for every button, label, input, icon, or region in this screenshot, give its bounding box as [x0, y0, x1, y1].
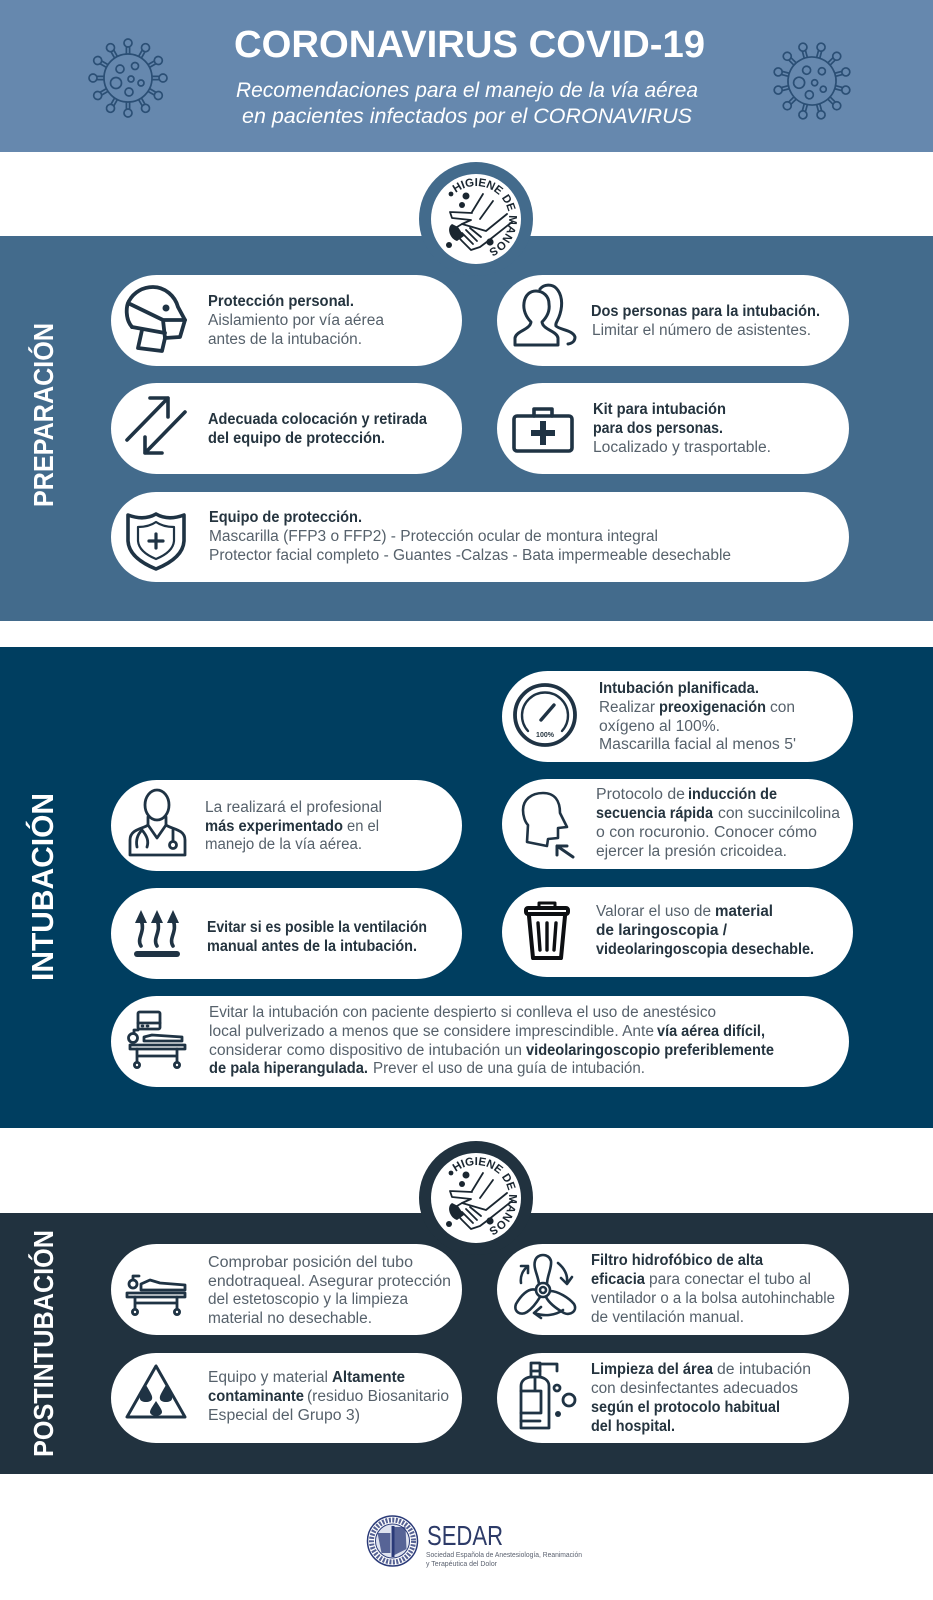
text: según el protocolo habitual [591, 1399, 780, 1416]
card: comprobar tubo [111, 1244, 462, 1335]
society name [426, 1552, 582, 1568]
subtitle: Recomendaciones para el manejo de la vía aérea [236, 79, 698, 102]
icon: face mask [127, 287, 185, 351]
text: videolaringoscopia desechable. [596, 941, 814, 958]
text: contaminante [208, 1388, 304, 1405]
text: endotraqueal. Asegurar protección [208, 1273, 451, 1290]
section label: intubación: INTUBACIÓN [24, 793, 60, 981]
text [596, 786, 840, 860]
icon: virus right [764, 33, 860, 129]
text: en el [347, 818, 379, 835]
text [207, 919, 427, 955]
text [209, 1004, 774, 1077]
text: material no desechable. [208, 1310, 372, 1327]
text: del estetoscopio y la limpieza [208, 1291, 408, 1308]
text: para dos personas. [593, 420, 723, 437]
card: dos personas [497, 275, 849, 366]
text: Limitar el número de asistentes. [592, 322, 811, 339]
seal [368, 1516, 418, 1566]
text: Especial del Grupo 3) [208, 1407, 360, 1424]
text [208, 293, 384, 348]
text: Limpieza del área [591, 1361, 713, 1378]
card: evitar intubación despierto [111, 996, 849, 1087]
card: kit [497, 383, 849, 474]
text: ejercer la presión cricoidea. [596, 843, 787, 860]
text: eficacia [591, 1271, 645, 1288]
card: limpieza del área [497, 1353, 849, 1443]
icon: doctor [130, 790, 185, 855]
text: Equipo de protección. [209, 509, 362, 526]
text: Adecuada colocación y retirada [208, 411, 427, 428]
text: del equipo de protección. [208, 430, 385, 447]
subtitle [236, 79, 698, 128]
text: manual antes de la intubación. [207, 938, 417, 955]
text: secuencia rápida [596, 805, 713, 822]
text: con [770, 699, 795, 716]
section label: preparación: PREPARACIÓN [28, 323, 59, 507]
title: CORONAVIRUS COVID-19 [234, 24, 705, 66]
icon: virus left [89, 39, 167, 117]
text: vía aérea difícil, [657, 1023, 765, 1040]
text: videolaringoscopio preferiblemente [526, 1042, 774, 1059]
text: inducción de [688, 786, 777, 803]
text [596, 903, 814, 958]
text [591, 303, 820, 339]
text: antes de la intubación. [208, 331, 362, 348]
text: Equipo y material [208, 1369, 328, 1386]
text: para conectar el tubo al [649, 1271, 811, 1288]
card: inducción secuencia rápida [502, 779, 853, 869]
text [599, 680, 796, 753]
text [591, 1252, 835, 1326]
text: Dos personas para la intubación. [591, 303, 820, 320]
society name: Sociedad Española de Anestesiología, Reanimación [426, 1552, 582, 1559]
subtitle: en pacientes infectados por el CORONAVIRUS [242, 105, 692, 128]
icon: shield [128, 514, 184, 569]
text: Mascarilla (FFP3 o FFP2) - Protección ocular de montura integral [209, 528, 658, 545]
icon: patient bed [127, 1276, 185, 1315]
text: Kit para intubación [593, 401, 726, 418]
badge: higiene de manos: HIGIENE DE MANOS [452, 1157, 517, 1235]
text: local pulverizado a menos que se considere imprescindible. Ante [209, 1023, 654, 1040]
badge: higiene de manos: HIGIENE DE MANOS [452, 178, 517, 256]
text: considerar como dispositivo de intubación un [209, 1042, 522, 1059]
card: filtro hidrofóbico [497, 1244, 849, 1335]
icon: patient bed with monitor [128, 1012, 185, 1068]
card: material desechable [502, 887, 853, 977]
text [208, 1369, 449, 1424]
text: preoxigenación [659, 699, 766, 716]
section label: postintubación: POSTINTUBACIÓN [28, 1230, 59, 1457]
icon: swap arrows [127, 398, 185, 453]
card: profesional experimentado [111, 780, 462, 871]
text [208, 1254, 451, 1327]
logo: SEDAR [368, 1516, 582, 1568]
text: Mascarilla facial al menos 5' [599, 736, 796, 753]
card: intubación planificada [502, 671, 853, 762]
text: Valorar el uso de [596, 903, 711, 920]
text: Evitar la intubación con paciente despierto si conlleva el uso de anestésico [209, 1004, 716, 1021]
icon: medical kit [514, 409, 572, 451]
icon: two people [515, 285, 575, 345]
text [209, 509, 731, 564]
text: Protector facial completo - Guantes -Calzas - Bata impermeable desechable [209, 547, 731, 564]
panel: preparación [0, 162, 933, 621]
panel: postintubación [0, 1141, 933, 1474]
icon: disinfectant spray [521, 1363, 575, 1428]
card: protección personal [111, 275, 462, 366]
text [591, 1361, 811, 1435]
text: Realizar [599, 699, 655, 716]
text: oxígeno al 100%. [599, 718, 720, 735]
text: con desinfectantes adecuados [591, 1380, 798, 1397]
icon: gauge [515, 685, 575, 745]
text: Localizado y trasportable. [593, 439, 771, 456]
text: Aislamiento por vía aérea [208, 312, 384, 329]
text: Altamente [332, 1369, 405, 1386]
header band [0, 0, 933, 152]
text: de intubación [717, 1361, 811, 1378]
icon: fan [515, 1255, 575, 1318]
text: Comprobar posición del tubo [208, 1254, 413, 1271]
card: altamente contaminante [111, 1353, 462, 1443]
society name: y Terapéutica del Dolor [426, 1561, 498, 1568]
card: equipo de protección [111, 492, 849, 582]
icon: heat arrows [134, 910, 180, 957]
text [208, 411, 427, 447]
text: Prever el uso de una guía de intubación. [373, 1060, 645, 1077]
text [593, 401, 771, 456]
card: evitar ventilación manual [111, 888, 462, 979]
text: Filtro hidrofóbico de alta [591, 1252, 763, 1269]
text: Evitar si es posible la ventilación [207, 919, 427, 936]
badge: higiene de manos [419, 162, 533, 264]
text: de laringoscopia / [596, 922, 728, 939]
wordmark: SEDAR [427, 1520, 503, 1551]
text: Protocolo de [596, 786, 685, 803]
icon: radiation triangle [127, 1366, 185, 1417]
icon: trash can [526, 903, 568, 958]
text: más experimentado [205, 818, 343, 835]
text: ventilador o a la bolsa autohinchable [591, 1290, 835, 1307]
text: del hospital. [591, 1418, 675, 1435]
icon: head profile with arrow [523, 793, 573, 857]
text: o con rocuronio. Conocer cómo [596, 824, 817, 841]
text [205, 799, 382, 853]
text: La realizará el profesional [205, 799, 382, 816]
badge: higiene de manos [419, 1141, 533, 1243]
text: de ventilación manual. [591, 1309, 744, 1326]
text: (residuo Biosanitario [307, 1388, 449, 1405]
card: colocación y retirada [111, 383, 462, 474]
text: Protección personal. [208, 293, 354, 310]
panel: intubación [0, 647, 933, 1128]
text: con succinilcolina [718, 805, 840, 822]
text: material [715, 903, 773, 920]
text: de pala hiperangulada. [209, 1060, 368, 1077]
text: manejo de la vía aérea. [205, 836, 362, 853]
icon: gauge: 100% [536, 732, 555, 739]
text: Intubación planificada. [599, 680, 759, 697]
